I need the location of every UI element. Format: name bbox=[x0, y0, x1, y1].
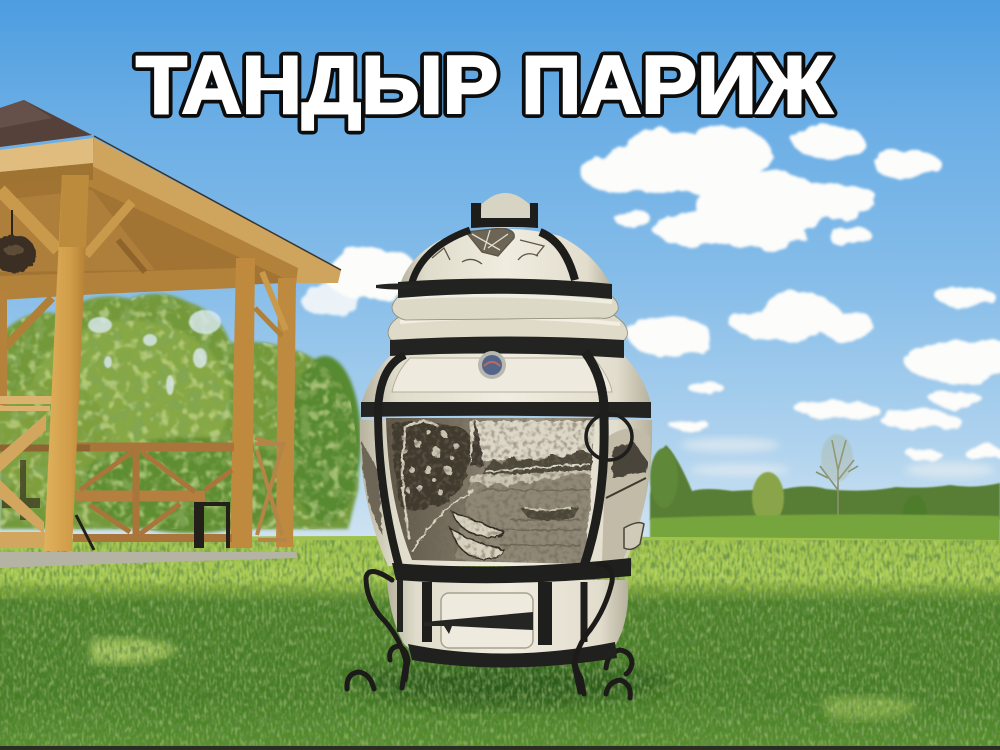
gazebo: horizontal beam bbox=[0, 268, 236, 300]
gazebo: roof bbox=[0, 100, 92, 147]
gazebo: braces bbox=[0, 190, 286, 350]
bare tree bbox=[816, 440, 858, 524]
tandoor: lid straps bbox=[411, 230, 575, 286]
trees: sky gaps bbox=[88, 310, 221, 395]
relief: sky bbox=[470, 421, 595, 462]
relief: bridge bbox=[470, 470, 590, 488]
trees: leaf texture bbox=[0, 290, 365, 535]
cloud: behind gazebo bbox=[300, 248, 420, 316]
tandoor: lid relief bbox=[432, 228, 544, 264]
relief: town bbox=[484, 450, 592, 478]
cloud: top right small bbox=[614, 127, 942, 246]
tandoor: relief panel bbox=[385, 418, 597, 566]
tandoor: stand feet bbox=[347, 646, 632, 698]
gazebo: left railing bbox=[0, 396, 52, 411]
relief: boats bbox=[450, 512, 504, 559]
tandoor: upper band bbox=[390, 336, 624, 358]
relief: river bbox=[455, 478, 592, 560]
tandoor: chimney cap bbox=[471, 193, 538, 228]
gazebo: railing bbox=[0, 438, 287, 540]
relief: left panel bbox=[361, 440, 382, 535]
gazebo: fascia bbox=[92, 138, 341, 283]
gazebo: concrete slab bbox=[0, 552, 298, 568]
tandoor bbox=[347, 193, 652, 698]
lawn bbox=[0, 514, 1000, 750]
gazebo: bench bbox=[194, 502, 230, 548]
gazebo: left edge post bbox=[0, 290, 7, 405]
title: ТАНДЫР ПАРИЖ bbox=[136, 40, 833, 131]
tandoor: vertical straps bbox=[378, 352, 604, 645]
gazebo: main post bbox=[44, 175, 89, 551]
cloud: far right bbox=[905, 340, 1000, 382]
relief: right panel bbox=[602, 428, 650, 562]
tandoor: middle band bbox=[361, 402, 651, 418]
sky background bbox=[0, 0, 1000, 560]
tandoor: ring 2 bbox=[388, 314, 627, 345]
tandoor: thermometer bbox=[478, 351, 506, 379]
cloud: centre small bbox=[628, 287, 995, 355]
gazebo: right front post bbox=[230, 258, 255, 548]
tandoor: stand scrolls bbox=[366, 564, 612, 692]
distant tree line bbox=[650, 434, 1000, 535]
lawn: lit patches bbox=[90, 638, 180, 664]
bottom edge strip bbox=[0, 746, 1000, 750]
tandoor: lid dome bbox=[400, 229, 612, 288]
relief: trees bbox=[392, 421, 470, 510]
tandoor: shoulder bbox=[361, 354, 651, 404]
cloud: right middle bbox=[731, 294, 875, 342]
tandoor: firebox bbox=[387, 580, 628, 662]
gazebo bbox=[0, 100, 341, 568]
title: ТАНДЫР ПАРИЖ bbox=[136, 40, 833, 131]
gazebo: lantern bbox=[0, 210, 36, 273]
gazebo: ceiling bbox=[0, 165, 305, 296]
gazebo: back post bbox=[276, 278, 296, 547]
cloud: low streaks bbox=[670, 384, 1000, 461]
tandoor: base band bbox=[392, 558, 631, 583]
clouds bbox=[300, 127, 1000, 461]
cloud: large middle bbox=[652, 169, 878, 251]
tandoor: lid band bbox=[398, 278, 612, 299]
cloud: large top bbox=[580, 128, 771, 194]
tandoor: lower body panel bbox=[360, 420, 652, 566]
tandoor: ring 1 bbox=[392, 292, 618, 320]
tandoor: firebox door bbox=[424, 593, 533, 648]
background trees bbox=[0, 290, 365, 535]
tandoor: ring handle bbox=[586, 414, 632, 460]
tandoor: lower band bbox=[408, 642, 617, 668]
relief: eiffel tower bbox=[470, 420, 484, 466]
